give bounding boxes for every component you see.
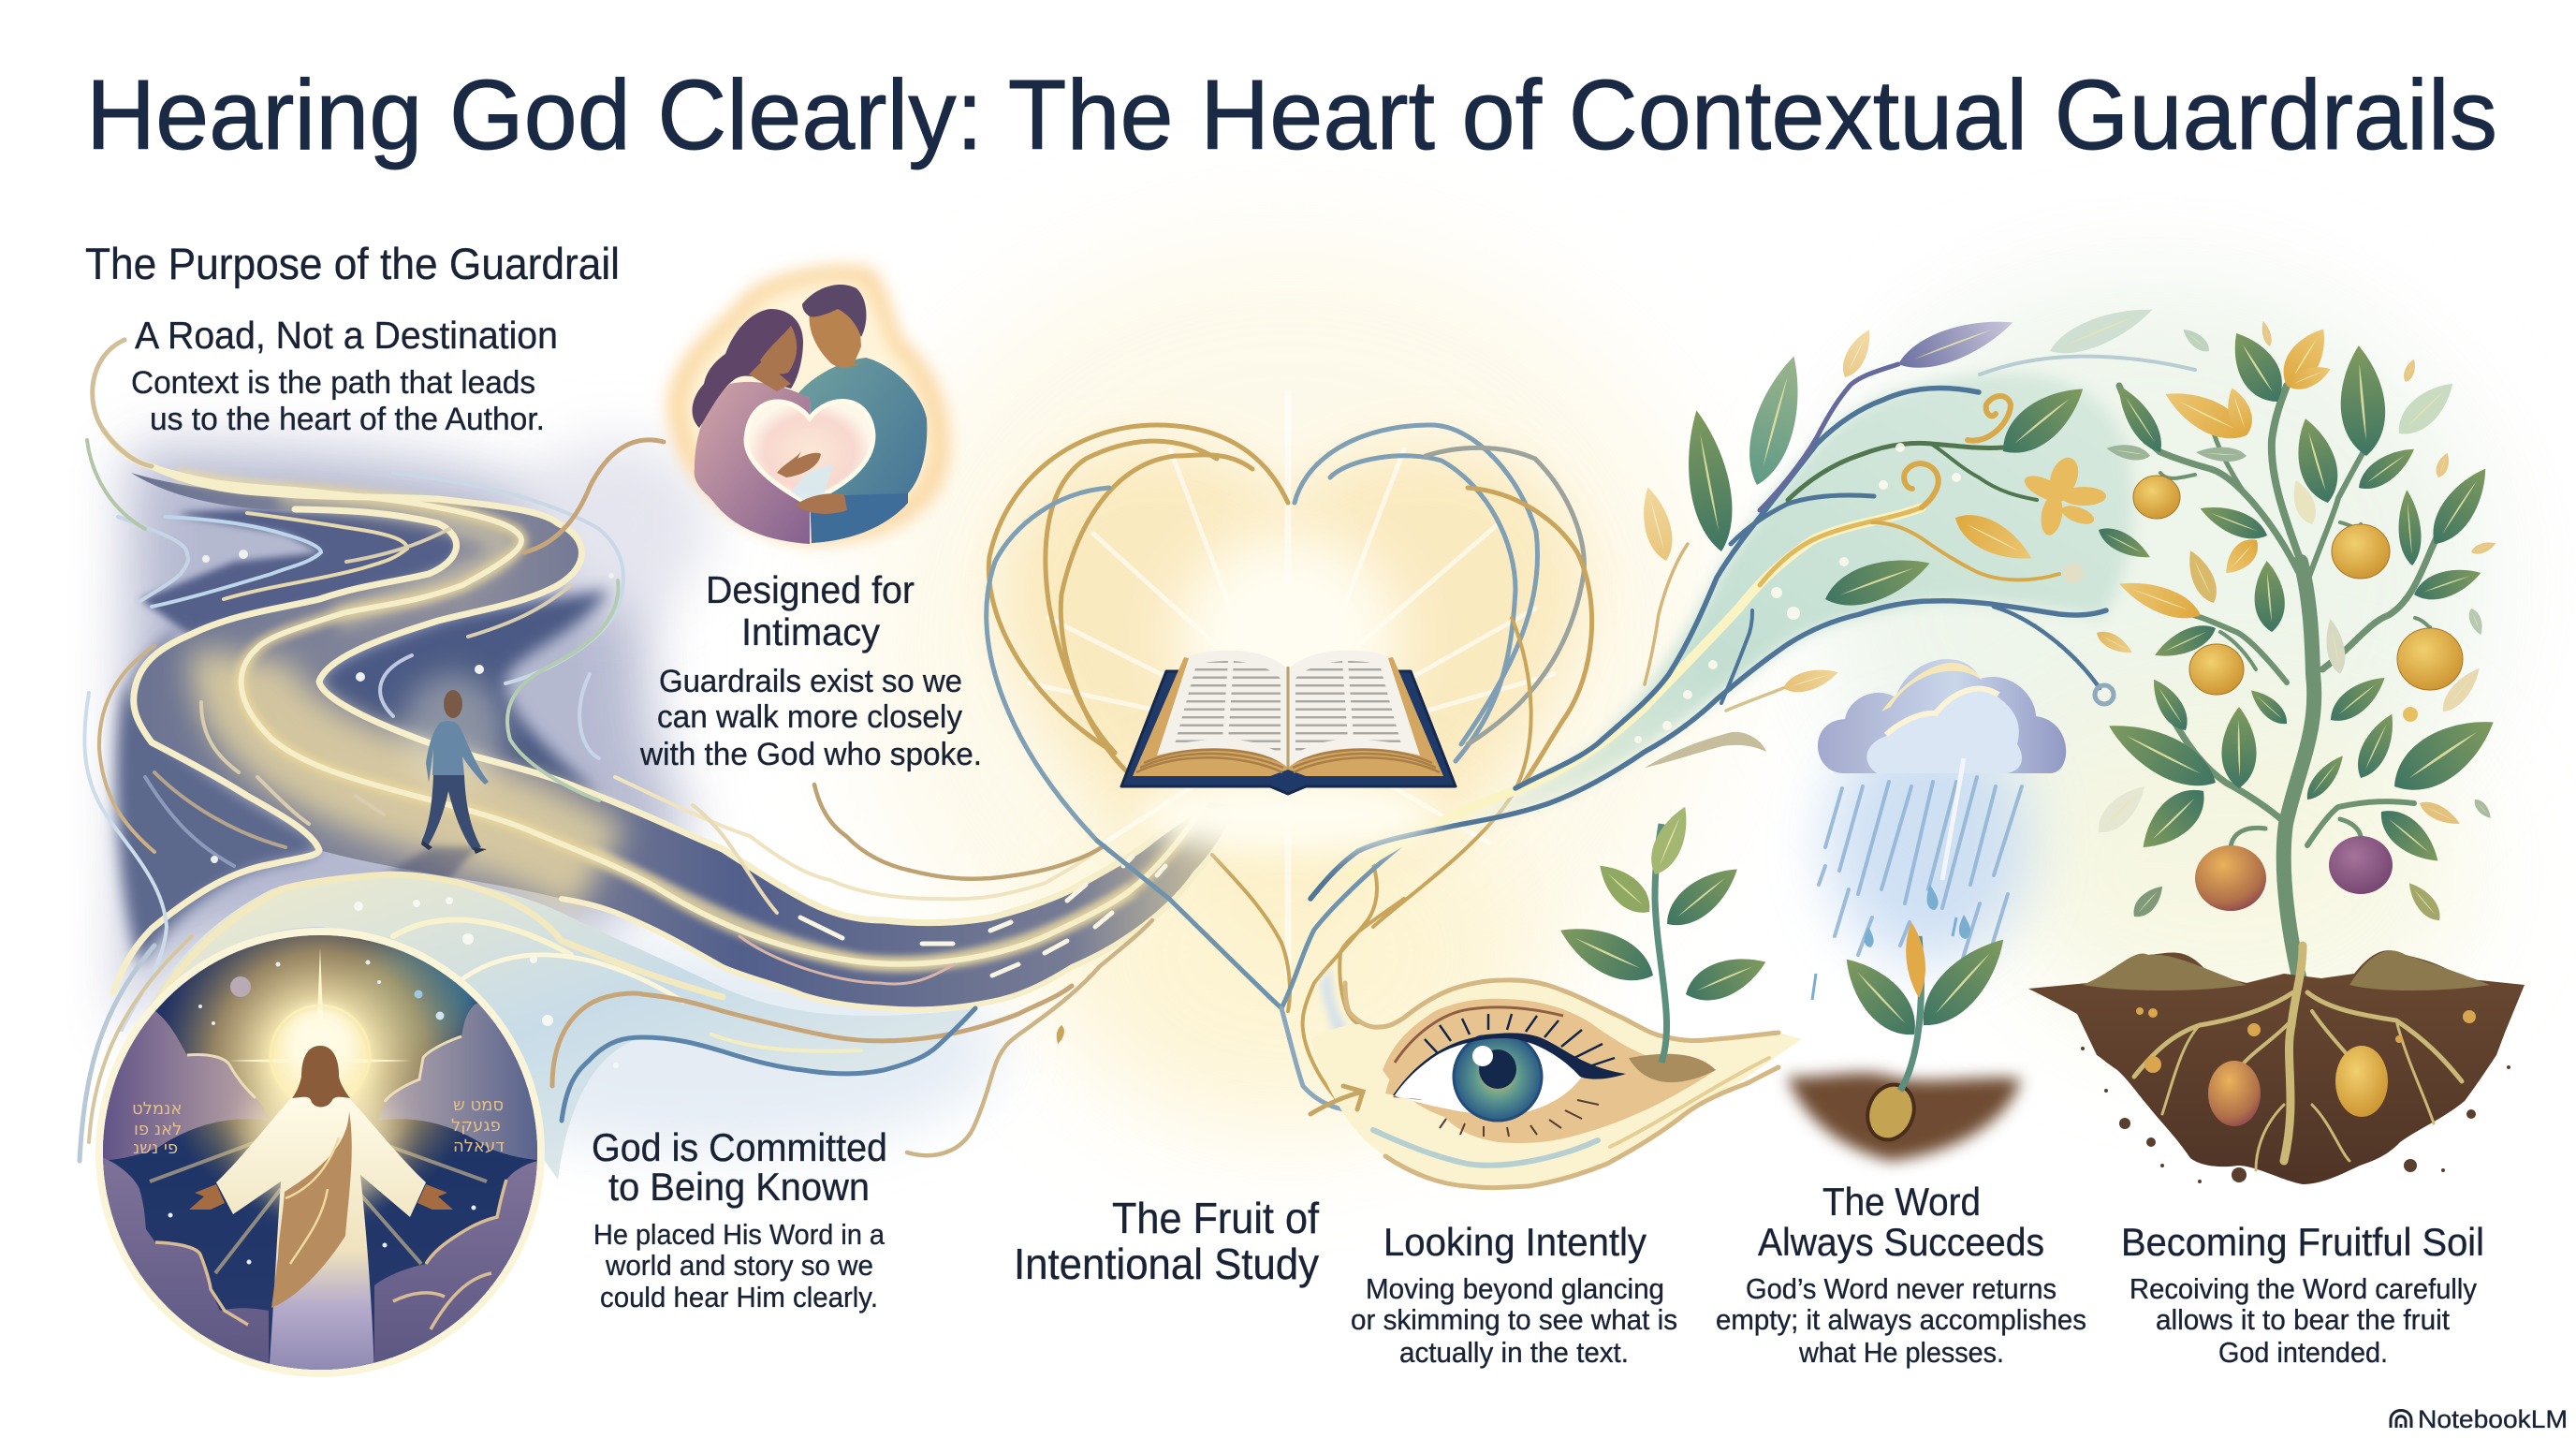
- text block: Becoming Fruitful Soil: allows it to bear the fruit: [2156, 1303, 2450, 1336]
- illustration: heart of strands: [987, 393, 1592, 1109]
- illustration: couple holding glowing heart: [666, 264, 951, 545]
- tree branches: [2119, 386, 2439, 992]
- script text: פגעקל: [451, 1116, 501, 1136]
- script text: פי נשנ: [133, 1138, 178, 1158]
- text block: God is Committed: [592, 1125, 887, 1313]
- lashes: [1425, 1014, 1615, 1067]
- woman hair: [693, 309, 803, 428]
- purple clouds: [94, 1010, 269, 1161]
- rain streaks: [1819, 777, 2022, 964]
- text block: Designed for Intimacy: Designed for: [706, 568, 915, 611]
- text block: The Word Always Succeeds: empty; it always accomplishes: [1716, 1303, 2086, 1336]
- stars: [168, 961, 476, 1264]
- light rays: [228, 947, 412, 1064]
- text block: God is Committed: could hear Him clearly.: [600, 1281, 878, 1313]
- text block: A Road, Not a Destination: us to the heart of the Author.: [150, 402, 545, 437]
- section heading: fruit of intentional study: The Fruit of: [1112, 1194, 1319, 1242]
- text block: Designed for Intimacy: Guardrails exist so we: [659, 664, 962, 699]
- script text: אנמלט: [132, 1099, 182, 1119]
- illustration: fruitful soil with roots: [2028, 946, 2525, 1184]
- illustration: eye with golden swoosh: [1310, 967, 1802, 1188]
- text block: The Word Always Succeeds: God’s Word never returns: [1746, 1272, 2056, 1305]
- text block: A Road, Not a Destination: Context is the path that leads: [131, 365, 535, 401]
- title: Hearing God Clearly: The Heart of Contextual Guardrails: [86, 60, 2497, 170]
- raindrops: [1812, 885, 1970, 1000]
- section heading: fruit of intentional study: Intentional Study: [1014, 1240, 1319, 1288]
- hands: [777, 451, 821, 477]
- text block: Becoming Fruitful Soil: [2121, 1220, 2484, 1369]
- connector: committed text: [907, 920, 1152, 1155]
- text block: Looking Intently: or skimming to see what is: [1351, 1303, 1677, 1336]
- illustration: pale wave around circle: [80, 874, 1072, 1180]
- book text lines: [1175, 661, 1228, 744]
- background glows: [126, 234, 2490, 1152]
- road dashes: [800, 857, 1165, 976]
- pale side lines: [84, 440, 623, 1030]
- text block: The Word Always Succeeds: [1716, 1180, 2086, 1369]
- icon: walking person: [374, 674, 505, 889]
- text block: Designed for Intimacy: [639, 568, 982, 772]
- illustration: winding road: [84, 431, 1238, 1030]
- text block: Designed for Intimacy: with the God who spoke.: [639, 737, 982, 772]
- section heading: fruit of intentional study: [1014, 1194, 1319, 1288]
- small soil: [1629, 1054, 1716, 1082]
- logo: NotebookLM: NotebookLM: [2418, 1405, 2568, 1433]
- connector: road to couple: [524, 440, 664, 552]
- illustration: flowing vines: [1310, 298, 2195, 899]
- script text: דעאלה: [453, 1137, 505, 1156]
- script text: [132, 1095, 505, 1158]
- text block: The Word Always Succeeds: The Word: [1822, 1180, 1981, 1224]
- tree fruits: [2133, 476, 2180, 519]
- robe: [216, 1097, 426, 1376]
- glow blob: [666, 264, 951, 545]
- road cream edge lines: [104, 431, 1238, 1009]
- rays: [1030, 393, 1554, 974]
- icon: open book: [1121, 651, 1456, 852]
- text block: God is Committed: world and story so we: [605, 1249, 873, 1282]
- tree leaves: [2220, 324, 2293, 411]
- road glow lines: [176, 474, 1207, 964]
- illustration: sprouting seed: [1787, 922, 2021, 1161]
- man body: [798, 358, 927, 543]
- illustration: Christ in starry circle: [95, 928, 545, 1377]
- script text: סמט ש: [453, 1095, 504, 1115]
- text block: A Road, Not a Destination: [131, 314, 558, 437]
- pale crescent: [1320, 967, 1395, 1100]
- icon: gold flower: [2021, 454, 2106, 537]
- eye skin: [1383, 999, 1716, 1143]
- script text: לאנ פו: [134, 1120, 182, 1139]
- man head: [810, 307, 866, 368]
- eye white: [1395, 1034, 1582, 1116]
- text block: The Word Always Succeeds: what He plesses.: [1798, 1336, 2004, 1369]
- buried fruits: [2208, 1061, 2261, 1126]
- text block: Looking Intently: Looking Intently: [1383, 1220, 1647, 1264]
- text block: A Road, Not a Destination: A Road, Not a Destination: [135, 314, 558, 357]
- text block: Becoming Fruitful Soil: God intended.: [2218, 1336, 2388, 1369]
- road sparkles: [202, 550, 614, 863]
- text block: Designed for Intimacy: Intimacy: [741, 610, 880, 653]
- text block: Looking Intently: actually in the text.: [1399, 1336, 1629, 1369]
- drop accent: [1057, 1025, 1064, 1044]
- glowing heart: [746, 402, 873, 504]
- lower strands: [1212, 855, 1290, 1011]
- cream swoosh: [1310, 981, 1802, 1187]
- illustration: sprout above eye: [1552, 801, 1772, 1063]
- dark hairpin patches: [140, 509, 457, 635]
- connector: guardrails text to book: [814, 785, 1105, 879]
- text block: Becoming Fruitful Soil: Becoming Fruitful Soil: [2121, 1220, 2484, 1264]
- woman body: [695, 382, 810, 544]
- roots: [2134, 946, 2462, 1170]
- illustration: rain cloud: [1812, 659, 2066, 1000]
- vine leaves: [1677, 407, 1741, 555]
- connector: top road loop: [93, 340, 152, 466]
- hands: [189, 1184, 453, 1210]
- section heading: purpose: The Purpose of the Guardrail: [85, 239, 620, 288]
- road surface: [131, 473, 1238, 1009]
- text block: Looking Intently: Moving beyond glancing: [1366, 1272, 1664, 1305]
- text block: Becoming Fruitful Soil: Recoiving the Word carefully: [2130, 1272, 2477, 1305]
- text block: God is Committed: God is Committed: [592, 1125, 887, 1169]
- text block: Looking Intently: [1351, 1220, 1677, 1369]
- warm road glow: [242, 655, 599, 871]
- upper lid cover: [1385, 1004, 1626, 1095]
- text block: God is Committed: He placed His Word in a: [593, 1218, 886, 1251]
- hair and face: [292, 1046, 350, 1107]
- illustration: fruit tree: [2090, 320, 2506, 992]
- text block: Designed for Intimacy: can walk more closely: [657, 699, 962, 735]
- text block: God is Committed: to Being Known: [608, 1165, 870, 1209]
- text block: The Word Always Succeeds: Always Succeeds: [1758, 1220, 2044, 1264]
